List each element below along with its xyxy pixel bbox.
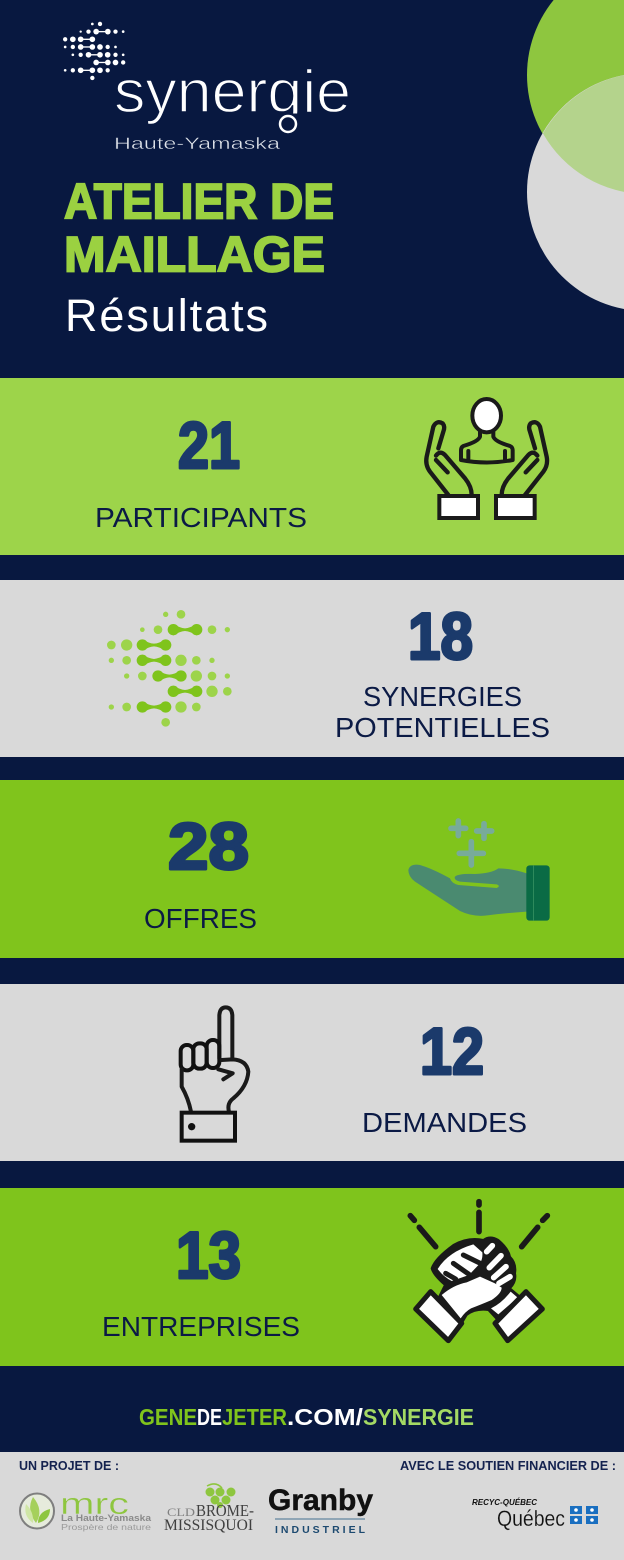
label synergies potentielles xyxy=(335,681,550,743)
logo: Recyc-Québec: Québec xyxy=(497,1506,565,1531)
logo: synergie Haute-Yamaska xyxy=(63,22,351,153)
label synergies potentielles: POTENTIELLES xyxy=(335,712,550,743)
logo: CLD Brome-Missisquoi: MISSISQUOI xyxy=(164,1517,253,1534)
number 21: 21 xyxy=(178,408,240,482)
title line 1: ATELIER DE xyxy=(64,174,334,230)
logo: mrc xyxy=(20,1486,152,1532)
logo: CLD Brome-Missisquoi: BROME- xyxy=(196,1501,254,1520)
logo: Recyc-Québec: RECYC-QUÉBEC xyxy=(472,1498,537,1507)
logo: mrc: Prospère de nature xyxy=(61,1522,151,1532)
logo: Recyc-Québec xyxy=(472,1498,598,1531)
label entreprises: ENTREPRISES xyxy=(102,1311,300,1342)
logo: Granby Industriel xyxy=(268,1484,373,1536)
logo: mrc: mrc xyxy=(60,1486,129,1521)
subtitle: Résultats xyxy=(65,290,268,341)
logo: mrc: La Haute-Yamaska xyxy=(61,1513,152,1523)
title xyxy=(64,174,334,341)
icon: person held by two hands xyxy=(426,399,547,518)
label demandes: DEMANDES xyxy=(362,1107,527,1138)
panel: participants xyxy=(0,378,624,555)
website url: SYNERGIE xyxy=(363,1404,474,1430)
label participants: PARTICIPANTS xyxy=(95,502,307,533)
number 12: 12 xyxy=(420,1014,484,1088)
website url: GENE xyxy=(139,1404,197,1430)
panel: offres xyxy=(0,780,624,958)
logo dot pattern xyxy=(63,22,125,80)
panel: synergies potentielles xyxy=(0,580,624,757)
label offres: OFFRES xyxy=(144,903,257,934)
number 13: 13 xyxy=(176,1218,241,1292)
label synergies potentielles: SYNERGIES xyxy=(363,681,522,712)
logo subtitle: Haute-Yamaska xyxy=(114,134,281,153)
footer panel xyxy=(0,1452,624,1560)
logo: CLD Brome-Missisquoi: CLD xyxy=(167,1505,195,1519)
icon: hand pointing up xyxy=(181,1007,248,1141)
logo: Granby Industriel: Granby xyxy=(268,1484,373,1517)
website url: JETER xyxy=(222,1404,287,1430)
number 28: 28 xyxy=(168,809,249,883)
website url: DE xyxy=(197,1404,222,1430)
logo: Granby Industriel: INDUSTRIEL xyxy=(275,1524,366,1536)
logo wordmark: synergie xyxy=(114,58,351,125)
website url xyxy=(139,1404,474,1430)
icon: dot pattern xyxy=(107,610,232,727)
footer heading left: UN PROJET DE : xyxy=(19,1459,119,1473)
decorative overlapping circles xyxy=(527,0,624,311)
website url: .COM/ xyxy=(287,1404,364,1430)
logo: CLD Brome-Missisquoi xyxy=(164,1484,254,1534)
number 18: 18 xyxy=(408,599,473,673)
panel: entreprises xyxy=(0,1188,624,1366)
title line 2: MAILLAGE xyxy=(64,226,325,282)
panel: demandes xyxy=(0,984,624,1161)
icon: open hand with plus signs xyxy=(408,821,550,921)
icon: clasped hands xyxy=(410,1202,547,1341)
footer heading right: AVEC LE SOUTIEN FINANCIER DE : xyxy=(400,1459,616,1473)
